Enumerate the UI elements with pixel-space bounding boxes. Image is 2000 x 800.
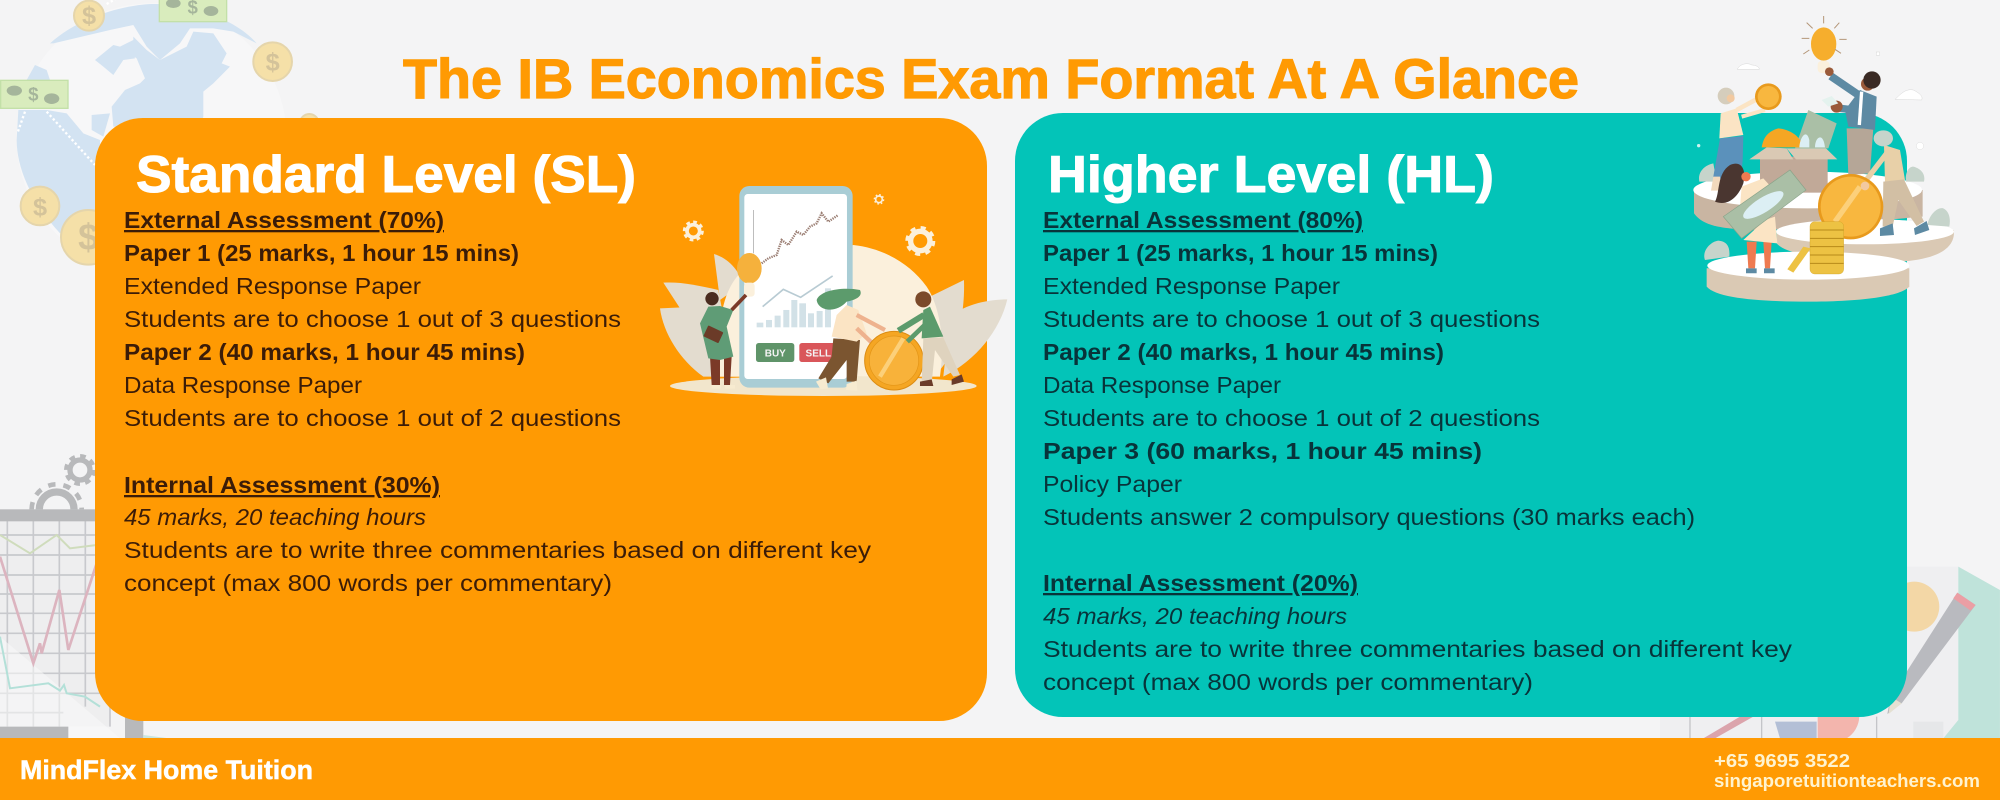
text block: internal assessment <box>1043 570 1793 695</box>
background illustration: globe with money: $ <box>78 216 99 257</box>
text block: external assessment <box>1043 207 1695 530</box>
text block: external assessment: Paper 2 (40 marks, 1 hour 45 mins) <box>1043 339 1444 365</box>
text block: internal assessment: Students are to write three commentaries based on different key <box>124 537 872 563</box>
background illustration: globe with money: $ <box>28 84 39 105</box>
text block: internal assessment: Internal Assessment (30%) <box>124 472 440 498</box>
illustration: phone with stock chart and people <box>660 186 1007 396</box>
text block: external assessment: Students are to choose 1 out of 3 questions <box>124 306 621 332</box>
text block: external assessment: Paper 3 (60 marks, 1 hour 45 mins) <box>1043 438 1482 464</box>
background illustration: globe with money: $ <box>82 2 96 30</box>
button: sell <box>799 343 838 362</box>
background illustration: pencil, coin and pie chart <box>1660 567 2000 738</box>
button: sell: SELL <box>806 348 831 359</box>
background illustration: globe with money: $ <box>33 193 47 221</box>
text block: external assessment: Extended Response Paper <box>1043 273 1340 299</box>
background illustration: globe with money: $ <box>266 49 280 77</box>
text block: external assessment: Data Response Paper <box>124 372 362 398</box>
text block: external assessment: Policy Paper <box>1043 471 1182 497</box>
text block: external assessment: Paper 2 (40 marks, 1 hour 45 mins) <box>124 339 525 365</box>
heading: higher level: Higher Level (HL) <box>1048 146 1494 204</box>
panel: higher level <box>1015 16 1954 717</box>
text block: external assessment: Paper 1 (25 marks, 1 hour 15 mins) <box>124 240 519 266</box>
text block: internal assessment: 45 marks, 20 teaching hours <box>124 504 427 530</box>
text block: external assessment: Students are to choose 1 out of 2 questions <box>124 405 621 431</box>
text block: internal assessment <box>124 472 872 596</box>
footer: contact details: singaporetuitionteachers.com <box>1714 771 1980 791</box>
background illustration: line chart board with gears <box>0 456 168 739</box>
text block: external assessment <box>124 207 621 431</box>
text block: external assessment: Paper 1 (25 marks, 1 hour 15 mins) <box>1043 240 1438 266</box>
heading: standard level: Standard Level (SL) <box>136 146 636 204</box>
text block: external assessment: Students are to choose 1 out of 3 questions <box>1043 306 1540 332</box>
footer: contact details <box>1714 751 1980 791</box>
footer: brand name: MindFlex Home Tuition <box>20 755 313 785</box>
button: buy: BUY <box>765 348 786 359</box>
footer: contact details: +65 9695 3522 <box>1714 751 1850 771</box>
illustration: people with coins on platforms <box>1693 16 1954 302</box>
text block: internal assessment: concept (max 800 words per commentary) <box>1043 669 1533 695</box>
title: The IB Economics Exam Format At A Glance <box>403 47 1579 110</box>
text block: internal assessment: Students are to write three commentaries based on different key <box>1043 636 1793 662</box>
footer bar <box>0 738 2000 800</box>
text block: internal assessment: 45 marks, 20 teaching hours <box>1043 603 1348 629</box>
button: buy <box>756 343 794 362</box>
text block: external assessment: External Assessment (70%) <box>124 207 444 233</box>
text block: internal assessment: concept (max 800 words per commentary) <box>124 570 612 596</box>
text block: external assessment: Data Response Paper <box>1043 372 1281 398</box>
text block: external assessment: Students answer 2 compulsory questions (30 marks each) <box>1043 504 1695 530</box>
text block: external assessment: External Assessment (80%) <box>1043 207 1363 233</box>
panel: standard level <box>95 118 1007 721</box>
background illustration: globe with money <box>1 0 319 273</box>
text block: external assessment: Students are to choose 1 out of 2 questions <box>1043 405 1540 431</box>
text block: internal assessment: Internal Assessment (20%) <box>1043 570 1358 596</box>
text block: external assessment: Extended Response Paper <box>124 273 421 299</box>
